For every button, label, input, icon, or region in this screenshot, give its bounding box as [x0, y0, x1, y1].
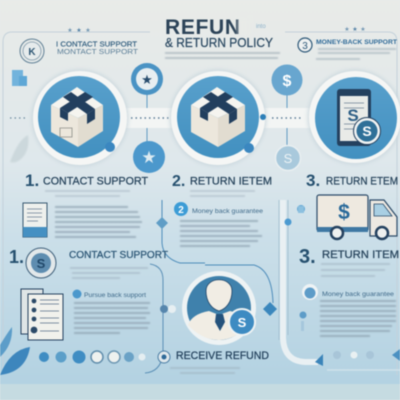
icon row [39, 350, 146, 364]
connector around refund [205, 265, 273, 303]
heading: 1 contact support: CONTACT SUPPORT [43, 176, 148, 188]
heading: 3 return etem: 3. [306, 171, 320, 190]
icon: dollar badge lower [276, 146, 300, 170]
connector bars [122, 88, 316, 146]
bottom indicators [333, 349, 400, 361]
heading: 1 contact support lower: 1. [9, 247, 24, 267]
heading: 1 contact support lower: S [37, 256, 46, 271]
icon: coin [229, 309, 255, 335]
text block: step 2 [180, 221, 262, 246]
heading: 1 contact support: 1. [25, 171, 39, 190]
footer lines [327, 369, 400, 371]
truck icon: $ [338, 201, 350, 224]
heading: 3 return item lower: 3. [299, 246, 316, 268]
icon: dollar badge upper: $ [283, 73, 292, 90]
node pair [160, 305, 176, 313]
dashed guide right [279, 200, 288, 340]
icon: checklist [21, 289, 63, 340]
truck icon [317, 195, 397, 239]
small icons by truck [284, 205, 305, 226]
title [165, 16, 274, 50]
arrow tip [315, 354, 323, 366]
heading: 3 return item lower [299, 246, 399, 268]
body text lower right [321, 264, 390, 276]
label: pursue back support [72, 290, 146, 299]
header: money-back support [298, 38, 397, 59]
icon: dollar badge lower: S [284, 151, 293, 166]
icon: dollar coin: S [362, 123, 372, 139]
icon: star badge lower: ★ [141, 148, 157, 167]
faint leaf and dots [10, 118, 28, 162]
icon: diamond node [156, 217, 168, 229]
heading: receive refund: RECEIVE REFUND [176, 350, 269, 362]
icon: document card [23, 203, 47, 237]
step 1 circle with box [32, 70, 128, 166]
node: refund label [158, 351, 170, 363]
icon: box [191, 87, 245, 147]
header text: contact support: I CONTACT SUPPORT [56, 40, 137, 48]
icon: star badge upper [131, 63, 163, 95]
icon: small coin right [302, 284, 318, 300]
heading: 3 return etem [306, 171, 398, 190]
top stars: ★ [85, 27, 91, 34]
label: money back right: Money back guarantee [322, 291, 394, 298]
body text lower [70, 268, 148, 278]
heading: 1 contact support lower [9, 247, 168, 278]
heading: 1 contact support lower: CONTACT SUPPORT [69, 250, 168, 261]
label: money back: Money back guarantee [192, 208, 263, 215]
icon: star badge upper: ★ [141, 72, 153, 87]
text block: lower left [74, 303, 150, 333]
icon: person [188, 280, 250, 340]
icon: K badge [20, 39, 44, 63]
top stars: ★ [67, 27, 73, 34]
step 3 circle with tablet [308, 70, 400, 164]
icon: dollar badge upper [272, 64, 302, 96]
label: pursue back support: Pursue back support [84, 292, 146, 299]
icon: star badge lower [133, 141, 165, 173]
connector nodes [105, 114, 266, 153]
badge: 2: 2 [178, 205, 184, 216]
body text under refund [170, 368, 240, 373]
step 2 circle with box [170, 70, 266, 166]
heading: 1 contact support [25, 171, 148, 190]
small icons right [300, 312, 306, 331]
header text: contact support [56, 40, 139, 56]
vertical connector [162, 200, 205, 263]
badge: 2 [174, 202, 188, 216]
icon: small document [12, 70, 27, 86]
title: into [256, 24, 266, 30]
body text below headings [45, 191, 255, 196]
header: money-back support: MONEY-BACK SUPPORT [316, 39, 397, 46]
text block: step 1 [55, 207, 142, 237]
connector to refund [145, 264, 163, 373]
top stars: ★ [344, 26, 350, 33]
icon: K badge: K [28, 47, 36, 58]
heading: 2 return item [172, 173, 272, 190]
top stars: ★ [360, 26, 366, 33]
coin letter: S [238, 315, 247, 330]
top stars: ★ [352, 26, 358, 33]
text block: lower right [320, 301, 396, 336]
icon: diamond right [263, 302, 277, 316]
heading: 3 return item lower: RETURN ITEM [322, 249, 399, 261]
icon: tablet: S [347, 106, 359, 125]
step 4 circle with person [182, 271, 256, 345]
title: & RETURN POLICY [165, 36, 274, 50]
header: money-back support: 3 [302, 41, 308, 52]
title rule lines [165, 53, 280, 58]
icon: leaves [0, 327, 30, 375]
heading: 2 return item: 2. [172, 173, 185, 190]
top stars [67, 26, 366, 34]
vertical band right [283, 200, 318, 362]
top stars: ★ [76, 27, 82, 34]
icon: box [51, 87, 103, 147]
title: REFUN [165, 16, 240, 39]
heading: 2 return item: RETURN IETEM [190, 176, 272, 188]
header text: contact support: MONTACT SUPPORT [57, 49, 139, 56]
